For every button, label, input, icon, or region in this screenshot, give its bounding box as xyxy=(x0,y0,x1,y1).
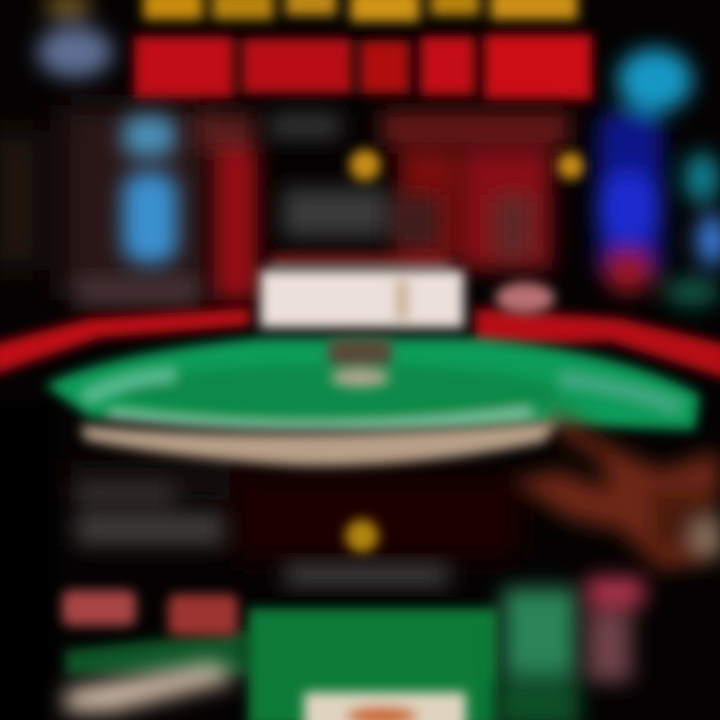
lower centre text block xyxy=(284,563,449,587)
icon: yellow chip lower xyxy=(345,519,379,553)
icon: yellow chip right xyxy=(557,152,585,180)
white sign on table xyxy=(260,254,464,328)
top left icon xyxy=(37,0,113,78)
centre grey text block xyxy=(282,188,440,250)
white blob on rail xyxy=(495,282,555,314)
red chips left xyxy=(62,590,238,636)
right blue figure xyxy=(596,48,720,306)
title line: red xyxy=(134,34,592,100)
poker table: green felt xyxy=(45,338,700,431)
table rail: red xyxy=(0,308,720,380)
pink chips stack right xyxy=(586,577,644,682)
panel row under left figure xyxy=(75,278,200,304)
bottom centre white box xyxy=(304,692,466,720)
hand xyxy=(510,405,720,570)
table edge: beige xyxy=(80,420,560,466)
lower green panel xyxy=(65,608,498,720)
white card lower left xyxy=(65,662,238,712)
background: dark maroon areas xyxy=(0,105,520,560)
lower green box xyxy=(495,588,580,720)
centre chips on table xyxy=(328,338,392,387)
title line: yellow xyxy=(143,0,578,22)
curtain and centre panels xyxy=(195,110,570,300)
left dark column xyxy=(0,405,53,720)
lower left text block xyxy=(75,484,225,546)
figure: blue player xyxy=(122,115,178,264)
icon: yellow chip top xyxy=(349,149,381,181)
